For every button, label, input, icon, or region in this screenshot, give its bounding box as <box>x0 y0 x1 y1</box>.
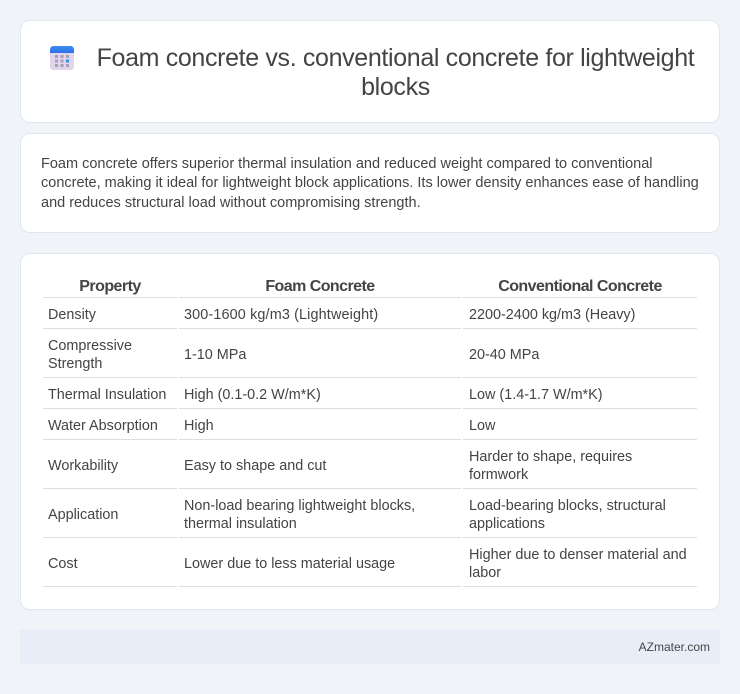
table: Cost <box>48 556 78 572</box>
title: Foam concrete vs. conventional concrete for lightweight <box>97 44 694 72</box>
summary text: and reduces structural load without compromising strength. <box>41 194 421 210</box>
summary text <box>41 156 699 210</box>
table: Workability <box>48 458 118 474</box>
table: Thermal Insulation <box>48 387 166 403</box>
table: Low <box>469 418 495 434</box>
table: labor <box>469 565 501 581</box>
table: applications <box>469 516 545 532</box>
table: High <box>184 418 214 434</box>
table: Conventional Concrete <box>498 278 662 295</box>
panel: comparison table <box>20 253 720 610</box>
panel: summary <box>20 133 720 233</box>
table: Higher due to denser material and <box>469 547 687 563</box>
title: blocks <box>361 73 430 101</box>
table: 300-1600 kg/m3 (Lightweight) <box>184 307 378 323</box>
table: Application <box>48 507 118 523</box>
table: Compressive <box>48 338 132 354</box>
table: Property <box>79 278 141 295</box>
table: 20-40 MPa <box>469 347 539 363</box>
summary text: Foam concrete offers superior thermal insulation and reduced weight compared to conventional <box>41 156 652 172</box>
icon: calendar <box>50 46 74 70</box>
table: thermal insulation <box>184 516 297 532</box>
footer bar <box>20 630 720 664</box>
table: 1-10 MPa <box>184 347 246 363</box>
title <box>97 44 694 101</box>
table: Load-bearing blocks, structural <box>469 498 666 514</box>
table: Lower due to less material usage <box>184 556 395 572</box>
table: Low (1.4-1.7 W/m*K) <box>469 387 603 403</box>
table: Density <box>48 307 96 323</box>
footer credit: AZmater.com <box>639 640 710 654</box>
table: Foam Concrete <box>265 278 375 295</box>
table: 2200-2400 kg/m3 (Heavy) <box>469 307 635 323</box>
table: Harder to shape, requires <box>469 449 632 465</box>
table: formwork <box>469 467 528 483</box>
table: Non-load bearing lightweight blocks, <box>184 498 415 514</box>
table: High (0.1-0.2 W/m*K) <box>184 387 321 403</box>
panel: header <box>20 20 720 123</box>
table: Water Absorption <box>48 418 158 434</box>
table: Easy to shape and cut <box>184 458 326 474</box>
table: Strength <box>48 356 102 372</box>
summary text: concrete, making it ideal for lightweight block applications. Its lower density enhances ease of handling <box>41 175 699 191</box>
